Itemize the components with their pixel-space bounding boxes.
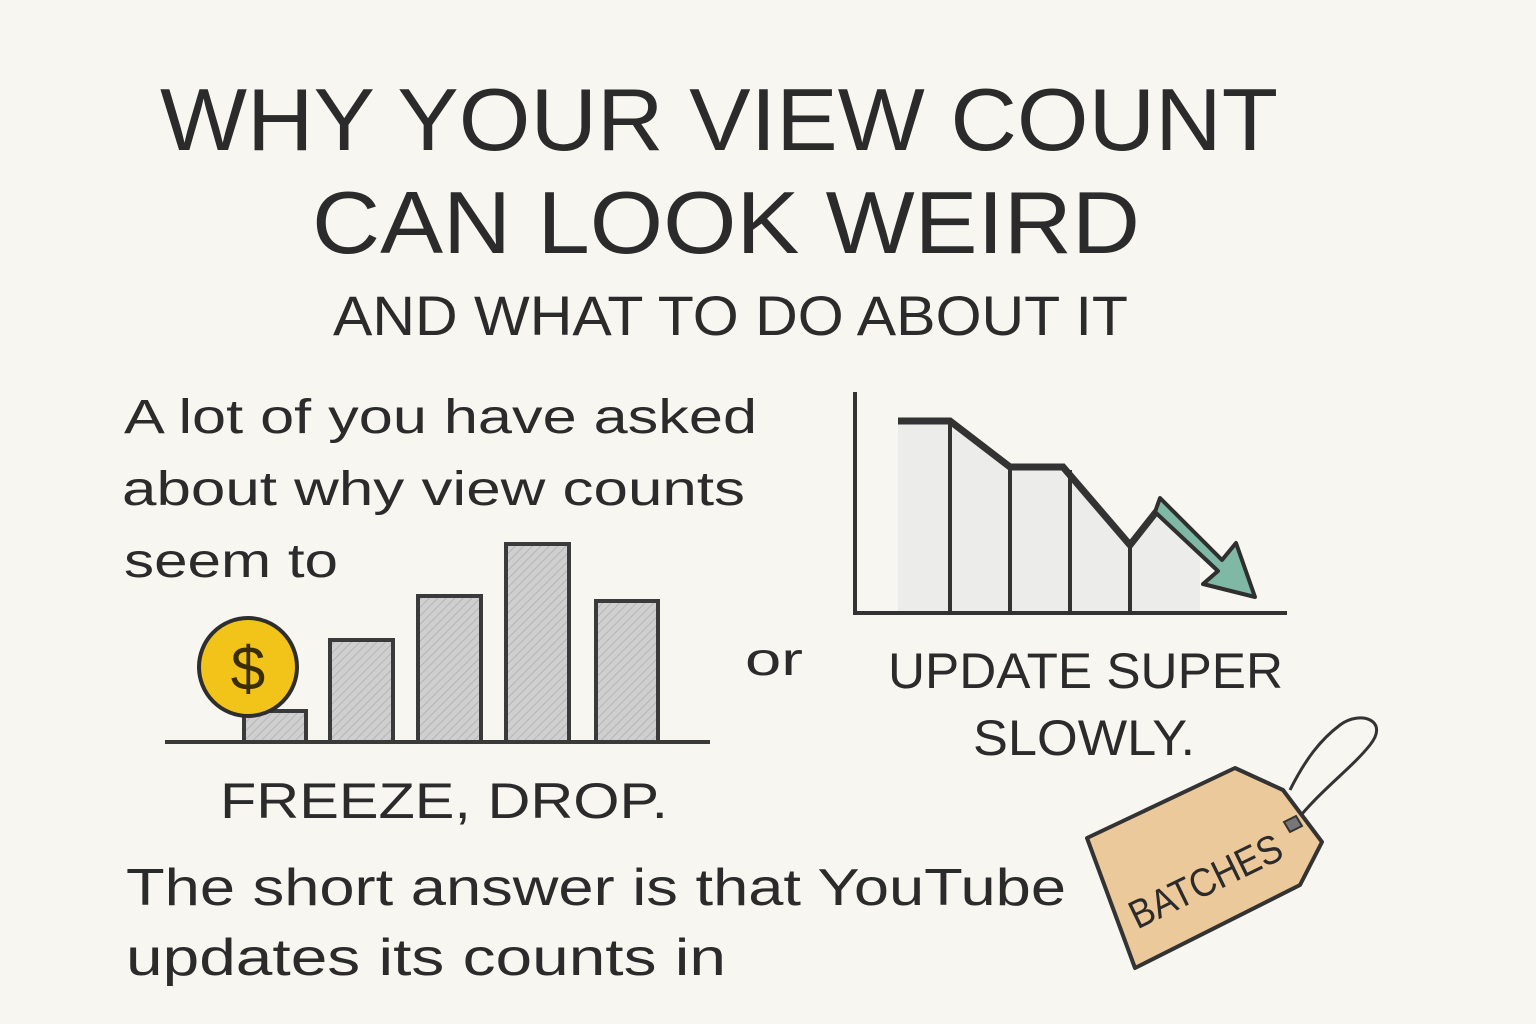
- bar chart: [165, 544, 710, 742]
- line chart: [855, 392, 1287, 613]
- answer text: [126, 859, 1066, 987]
- intro text: seem to: [124, 535, 338, 588]
- or: or: [745, 633, 803, 685]
- title: [160, 70, 1278, 272]
- label: update super slowly: UPDATE SUPER: [888, 643, 1283, 699]
- answer text: The short answer is that YouTube: [126, 859, 1066, 917]
- intro text: A lot of you have asked: [124, 391, 757, 444]
- label: update super slowly: SLOWLY.: [973, 710, 1195, 766]
- subtitle: AND WHAT TO DO ABOUT IT: [333, 284, 1128, 347]
- icon: batches tag: BATCHES: [1122, 826, 1290, 938]
- label: update super slowly: [888, 643, 1283, 766]
- arrow: down: [1155, 498, 1255, 597]
- icon: gold coin: [199, 618, 297, 716]
- intro text: [122, 391, 757, 588]
- title: CAN LOOK WEIRD: [312, 173, 1140, 272]
- label: freeze drop: FREEZE, DROP.: [220, 773, 668, 829]
- icon: gold coin: $: [231, 635, 265, 704]
- intro text: about why view counts: [122, 463, 745, 516]
- icon: batches tag: [1087, 718, 1377, 968]
- title: WHY YOUR VIEW COUNT: [160, 70, 1278, 169]
- answer text: updates its counts in: [126, 929, 726, 987]
